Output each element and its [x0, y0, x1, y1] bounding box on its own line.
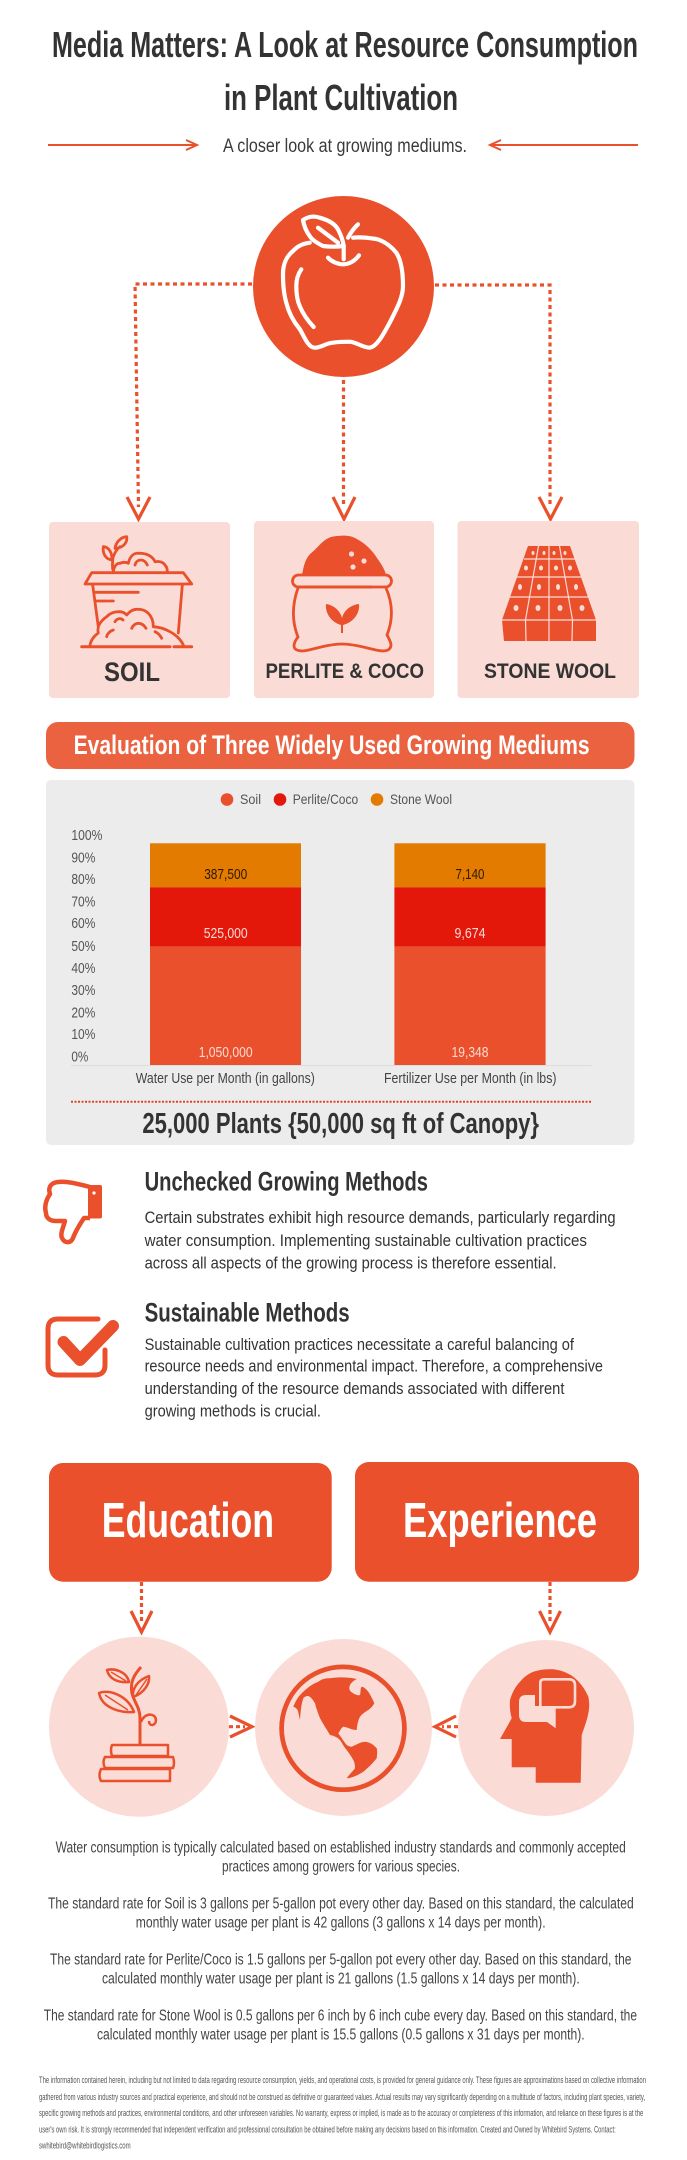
- text block: unchecked growing methods: Certain substrates exhibit high resource demands, particularly regarding: [145, 1208, 616, 1227]
- text block: unchecked growing methods: across all aspects of the growing process is therefore essential.: [145, 1254, 557, 1273]
- text block: unchecked growing methods: water consumption. Implementing sustainable cultivation practices: [144, 1231, 587, 1250]
- panel: soil: [49, 522, 230, 698]
- text block: unchecked growing methods: Unchecked Growing Methods: [145, 1167, 428, 1197]
- text block: soil rate: [48, 1896, 634, 1931]
- text block: perlite and coco rate: [50, 1952, 632, 1987]
- text block: soil rate: monthly water usage per plant is 42 gallons (3 gallons x 14 days per month).: [136, 1914, 546, 1931]
- icon: stone wool block: [501, 546, 597, 641]
- arrow: apple to stone wool: [435, 285, 562, 519]
- icon: globe: [282, 1667, 404, 1790]
- label: perlite and coco: PERLITE & COCO: [266, 660, 424, 683]
- chart y axis: 90%: [71, 850, 95, 866]
- title: in Plant Cultivation: [224, 77, 458, 118]
- box: education: [49, 1463, 332, 1582]
- label: stone wool: STONE WOOL: [484, 660, 616, 683]
- chart legend: [221, 791, 452, 807]
- circle: plant and books: [49, 1637, 229, 1817]
- chart legend: Stone Wool: [390, 791, 452, 807]
- stacked bar: water use: 525,000: [204, 926, 248, 942]
- text block: sustainable methods: Sustainable cultivation practices necessitate a careful balancing of: [145, 1335, 574, 1354]
- text block: water consumption intro: practices among growers for various species.: [222, 1859, 460, 1876]
- circle: globe: [255, 1639, 432, 1816]
- stacked bar: water use: [150, 843, 301, 1065]
- text block: sustainable methods: [145, 1298, 603, 1421]
- icon: perlite sack: [292, 536, 392, 651]
- stacked bar: water use: 1,050,000: [199, 1045, 253, 1061]
- chart y axis: 0%: [71, 1050, 88, 1066]
- text block: stone wool rate: [44, 2008, 637, 2043]
- stacked bar: fertilizer use: 9,674: [454, 926, 486, 942]
- chart caption: 25,000 Plants {50,000 sq ft of Canopy}: [142, 1108, 539, 1140]
- chart x axis labels: Water Use per Month (in gallons): [136, 1070, 315, 1087]
- box: experience: Experience: [403, 1494, 597, 1548]
- heading bar: evaluation: [46, 722, 634, 769]
- stacked bar: fertilizer use: 7,140: [456, 867, 484, 883]
- icon: head with speech bubbles: [500, 1669, 589, 1783]
- chart y axis: 80%: [71, 872, 95, 888]
- subtitle: A closer look at growing mediums.: [223, 136, 467, 157]
- box: experience: [355, 1462, 639, 1582]
- stacked bar: fertilizer use: 19,348: [452, 1045, 488, 1061]
- box: education: Education: [102, 1494, 274, 1548]
- icon: soil pot: [82, 537, 192, 647]
- icon: plant on books: [99, 1667, 174, 1781]
- chart y axis: 40%: [71, 961, 95, 977]
- chart y axis: 50%: [71, 939, 95, 955]
- icon: thumbs down: [45, 1182, 102, 1242]
- chart legend: Soil: [240, 791, 261, 807]
- label: soil: SOIL: [104, 657, 160, 687]
- text block: unchecked growing methods: [144, 1167, 616, 1273]
- icon: checkbox: [48, 1319, 113, 1375]
- arrow: experience to head: [540, 1582, 560, 1632]
- title: [52, 24, 638, 118]
- circle: head: [458, 1640, 634, 1816]
- arrow: apple to perlite and coco: [333, 380, 355, 519]
- chart legend: Perlite/Coco: [293, 791, 358, 807]
- stacked bar: water use: 387,500: [204, 867, 247, 883]
- chart y axis: 60%: [71, 916, 95, 932]
- panel: stone wool: [458, 521, 639, 698]
- panel: perlite and coco: [254, 521, 434, 698]
- text block: sustainable methods: Sustainable Methods: [145, 1298, 350, 1328]
- text block: sustainable methods: growing methods is crucial.: [145, 1402, 321, 1421]
- icon: apple circle: [253, 196, 434, 377]
- arrow: head to globe: [435, 1716, 458, 1737]
- chart x axis labels: Fertilizer Use per Month (in lbs): [384, 1070, 556, 1087]
- stacked bar: fertilizer use: [394, 843, 546, 1065]
- panel: chart: [46, 780, 634, 1145]
- chart y axis: 100%: [71, 828, 102, 844]
- text block: sustainable methods: resource needs and environmental impact. Therefore, a comprehensive: [145, 1357, 603, 1376]
- arrow: apple to soil: [127, 284, 252, 519]
- disclaimer: swhitebird@whitebirdlogistics.com: [39, 2140, 131, 2150]
- chart y axis: 70%: [71, 894, 95, 910]
- chart y axis: 30%: [71, 983, 95, 999]
- arrow: subtitle left: [48, 140, 197, 150]
- chart y axis: 10%: [71, 1027, 95, 1043]
- text block: sustainable methods: understanding of the resource demands associated with different: [145, 1379, 565, 1398]
- arrow: plant to globe: [229, 1716, 252, 1737]
- chart y axis: 20%: [71, 1006, 95, 1022]
- arrow: education to plant: [131, 1582, 152, 1632]
- chart x axis labels: [136, 1070, 557, 1087]
- disclaimer: [39, 2075, 646, 2150]
- chart y axis: [71, 828, 102, 1066]
- arrow: subtitle right: [490, 140, 638, 150]
- text block: water consumption intro: [56, 1840, 626, 1876]
